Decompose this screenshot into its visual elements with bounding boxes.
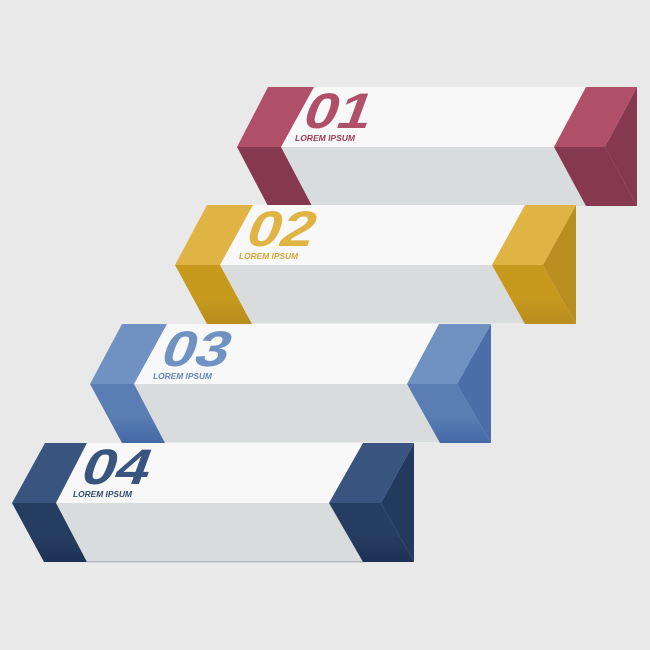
right cap front (329, 503, 414, 562)
label: LOREM IPSUM (295, 134, 355, 143)
top white face (237, 87, 586, 147)
left band bottom (12, 503, 87, 562)
right cap top (407, 324, 491, 384)
left band top (90, 324, 167, 384)
step 01 (crimson) (237, 84, 637, 206)
front grey face (220, 265, 525, 323)
left band top (12, 443, 87, 503)
label: LOREM IPSUM (239, 252, 298, 261)
left band bottom (90, 384, 165, 443)
right cap top (554, 87, 637, 147)
step 03 (blue) (90, 322, 491, 443)
right cap front (554, 147, 637, 206)
number 01: 01 (296, 84, 383, 139)
step 02 (gold) (175, 202, 576, 324)
right cap side (457, 324, 491, 443)
number 04: 04 (74, 440, 161, 495)
right cap front (492, 265, 576, 324)
right cap top (492, 205, 576, 265)
label: LOREM IPSUM (73, 490, 132, 499)
number 02: 02 (239, 202, 326, 257)
right cap front (407, 384, 491, 443)
left band bottom (175, 265, 252, 324)
left band top (175, 205, 253, 265)
front grey face (281, 147, 586, 206)
right cap top (329, 443, 414, 503)
left band bottom (237, 147, 312, 206)
right cap side (543, 205, 576, 324)
step 04 (navy) (12, 440, 414, 562)
top white face (12, 443, 363, 503)
right cap side (381, 443, 414, 562)
top white face (175, 205, 525, 265)
front grey face (56, 503, 363, 561)
label: LOREM IPSUM (153, 372, 212, 381)
number 03: 03 (154, 322, 241, 377)
top white face (90, 324, 439, 384)
left band top (237, 87, 314, 147)
right cap side (605, 87, 637, 206)
front grey face (134, 384, 440, 442)
